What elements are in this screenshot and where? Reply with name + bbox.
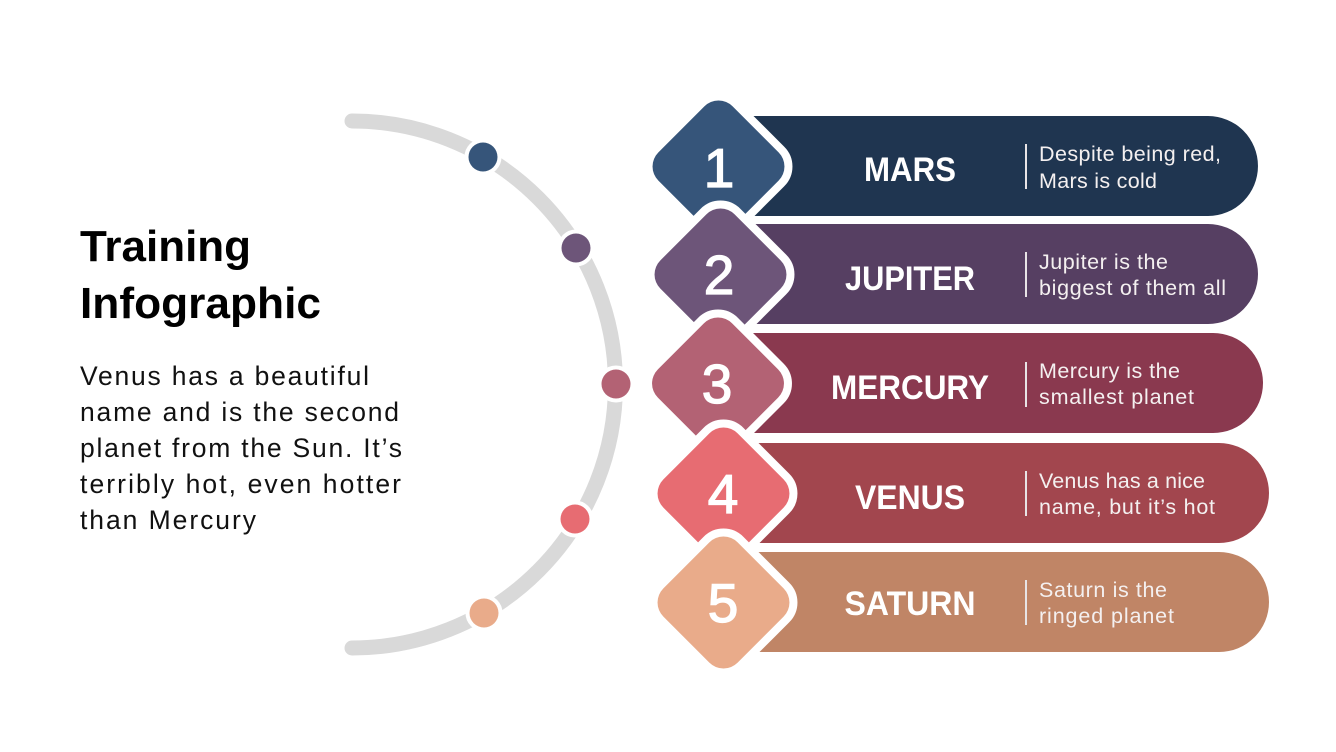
description: Despite being red,: [1039, 142, 1221, 166]
description: name, but it’s hot: [1039, 495, 1215, 519]
name: MERCURY: [831, 369, 989, 407]
timeline dot 1: [468, 142, 498, 172]
name: VENUS: [855, 479, 965, 517]
description: Venus has a nice: [1039, 469, 1205, 493]
title: [80, 222, 321, 328]
title: Infographic: [80, 279, 321, 328]
body text: [80, 361, 402, 535]
body text: terribly hot, even hotter: [80, 469, 401, 499]
number diamond: [649, 528, 798, 677]
description: Jupiter is the: [1039, 250, 1168, 274]
semicircular timeline arc: [352, 121, 630, 648]
row 4: Venus: [649, 419, 1269, 568]
row 5: Saturn: [649, 528, 1269, 677]
number diamond: [644, 309, 792, 458]
timeline dot 3: [602, 370, 630, 398]
description: Mercury is the: [1039, 359, 1180, 383]
body text: name and is the second: [80, 397, 399, 427]
bar: [745, 116, 1258, 216]
description: [1025, 469, 1215, 519]
description: smallest planet: [1039, 385, 1194, 409]
description: [1025, 142, 1221, 193]
number diamond: [649, 419, 798, 568]
timeline dot 5: [470, 598, 498, 628]
description: ringed planet: [1039, 604, 1174, 628]
bar: [745, 443, 1269, 543]
number diamond: 3: [702, 353, 732, 415]
body text: Venus has a beautiful: [80, 361, 369, 391]
description: [1025, 250, 1226, 300]
number diamond: 5: [708, 572, 738, 634]
description: biggest of them all: [1039, 276, 1226, 300]
description: Saturn is the: [1039, 578, 1167, 602]
name: MARS: [864, 151, 956, 189]
description: Mars is cold: [1039, 169, 1157, 193]
bar: [745, 224, 1258, 324]
name: JUPITER: [845, 260, 975, 298]
number diamond: 4: [708, 463, 738, 525]
row 1: Mars: [644, 92, 1258, 241]
number diamond: 2: [704, 244, 734, 306]
body text: planet from the Sun. It’s: [80, 433, 402, 463]
timeline dot 4: [560, 504, 590, 534]
timeline dot 2: [562, 234, 590, 262]
number diamond: 1: [704, 137, 734, 199]
description: [1025, 359, 1194, 409]
description: [1025, 578, 1174, 628]
body text: than Mercury: [80, 505, 257, 535]
row 3: Mercury: [644, 309, 1263, 458]
number diamond: [644, 92, 793, 241]
bar: [745, 333, 1263, 433]
number diamond: [646, 200, 795, 349]
name: SATURN: [844, 585, 976, 623]
bar: [745, 552, 1269, 652]
row 2: Jupiter: [646, 200, 1258, 349]
title: Training: [80, 222, 251, 271]
